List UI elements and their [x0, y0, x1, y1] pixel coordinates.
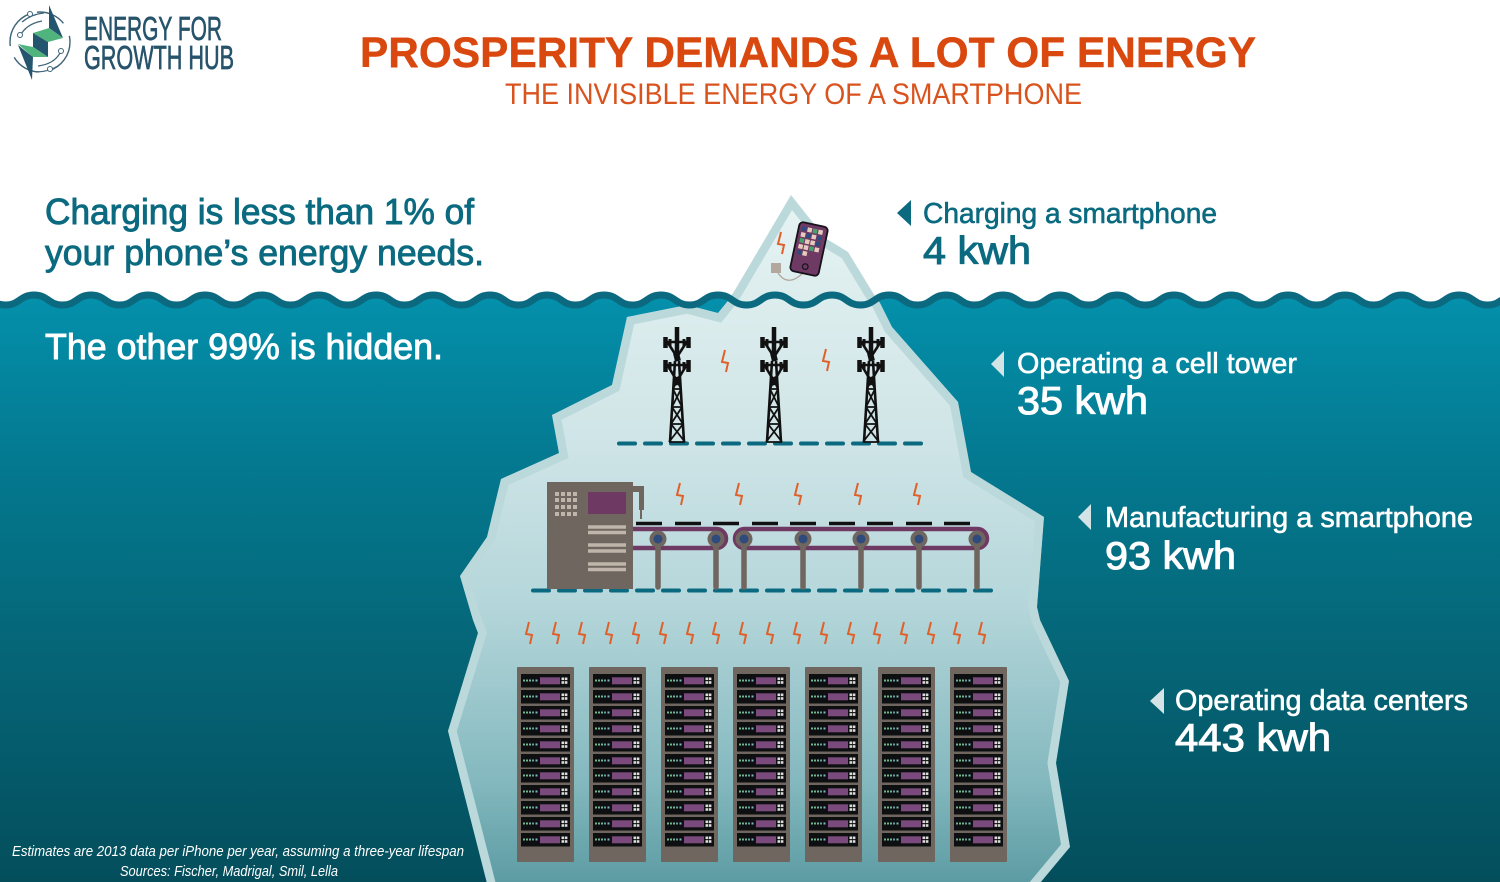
data center server racks: [517, 667, 1007, 862]
cell towers: [619, 327, 923, 444]
label: manufacturing a smartphone: Manufacturing a smartphone: [1105, 502, 1473, 534]
label: operating a cell tower: Operating a cell tower: [1017, 348, 1297, 380]
subtitle: THE INVISIBLE ENERGY OF A SMARTPHONE: [505, 78, 1082, 111]
logo wordmark: [84, 10, 234, 76]
left statement below water: The other 99% is hidden.: [45, 326, 443, 367]
wave line at water surface: [0, 295, 1500, 305]
logo wordmark: ENERGY FOR: [84, 10, 222, 47]
data center energy bolts: [526, 622, 985, 644]
footnote and sources: Estimates are 2013 data per iPhone per year, assuming a three-year lifespan: [12, 843, 464, 860]
label: charging a smartphone: 4 kwh: [923, 230, 1031, 273]
logo mark: [10, 5, 70, 80]
factory machine and conveyor: [533, 482, 995, 590]
label: operating a cell tower: 35 kwh: [1017, 380, 1148, 423]
label: operating data centers: 443 kwh: [1175, 717, 1331, 760]
left statement above water: your phone’s energy needs.: [45, 232, 484, 273]
label: manufacturing a smartphone: 93 kwh: [1105, 535, 1236, 578]
ground dashes: towers: [619, 442, 923, 446]
footnote and sources: Sources: Fischer, Madrigal, Smil, Lella: [120, 863, 338, 880]
label: operating a cell tower: [991, 348, 1297, 423]
label: operating data centers: [1150, 685, 1468, 760]
label: charging a smartphone: [897, 198, 1217, 273]
label: manufacturing a smartphone: [1078, 502, 1473, 578]
title: PROSPERITY DEMANDS A LOT OF ENERGY: [360, 29, 1256, 77]
left statement above water: Charging is less than 1% of: [45, 191, 475, 232]
icon: smartphone charging: [771, 222, 828, 280]
machine: [547, 482, 644, 589]
footnote and sources: [12, 843, 464, 880]
iceberg: [448, 195, 1070, 882]
logo: Energy for Growth Hub: [10, 5, 234, 80]
left statement above water: [45, 191, 484, 273]
label: operating data centers: Operating data centers: [1175, 685, 1468, 717]
background: water: [0, 295, 1500, 882]
logo wordmark: GROWTH HUB: [84, 39, 234, 76]
ground dashes: factory: [533, 588, 995, 592]
label: charging a smartphone: Charging a smartphone: [923, 198, 1217, 230]
